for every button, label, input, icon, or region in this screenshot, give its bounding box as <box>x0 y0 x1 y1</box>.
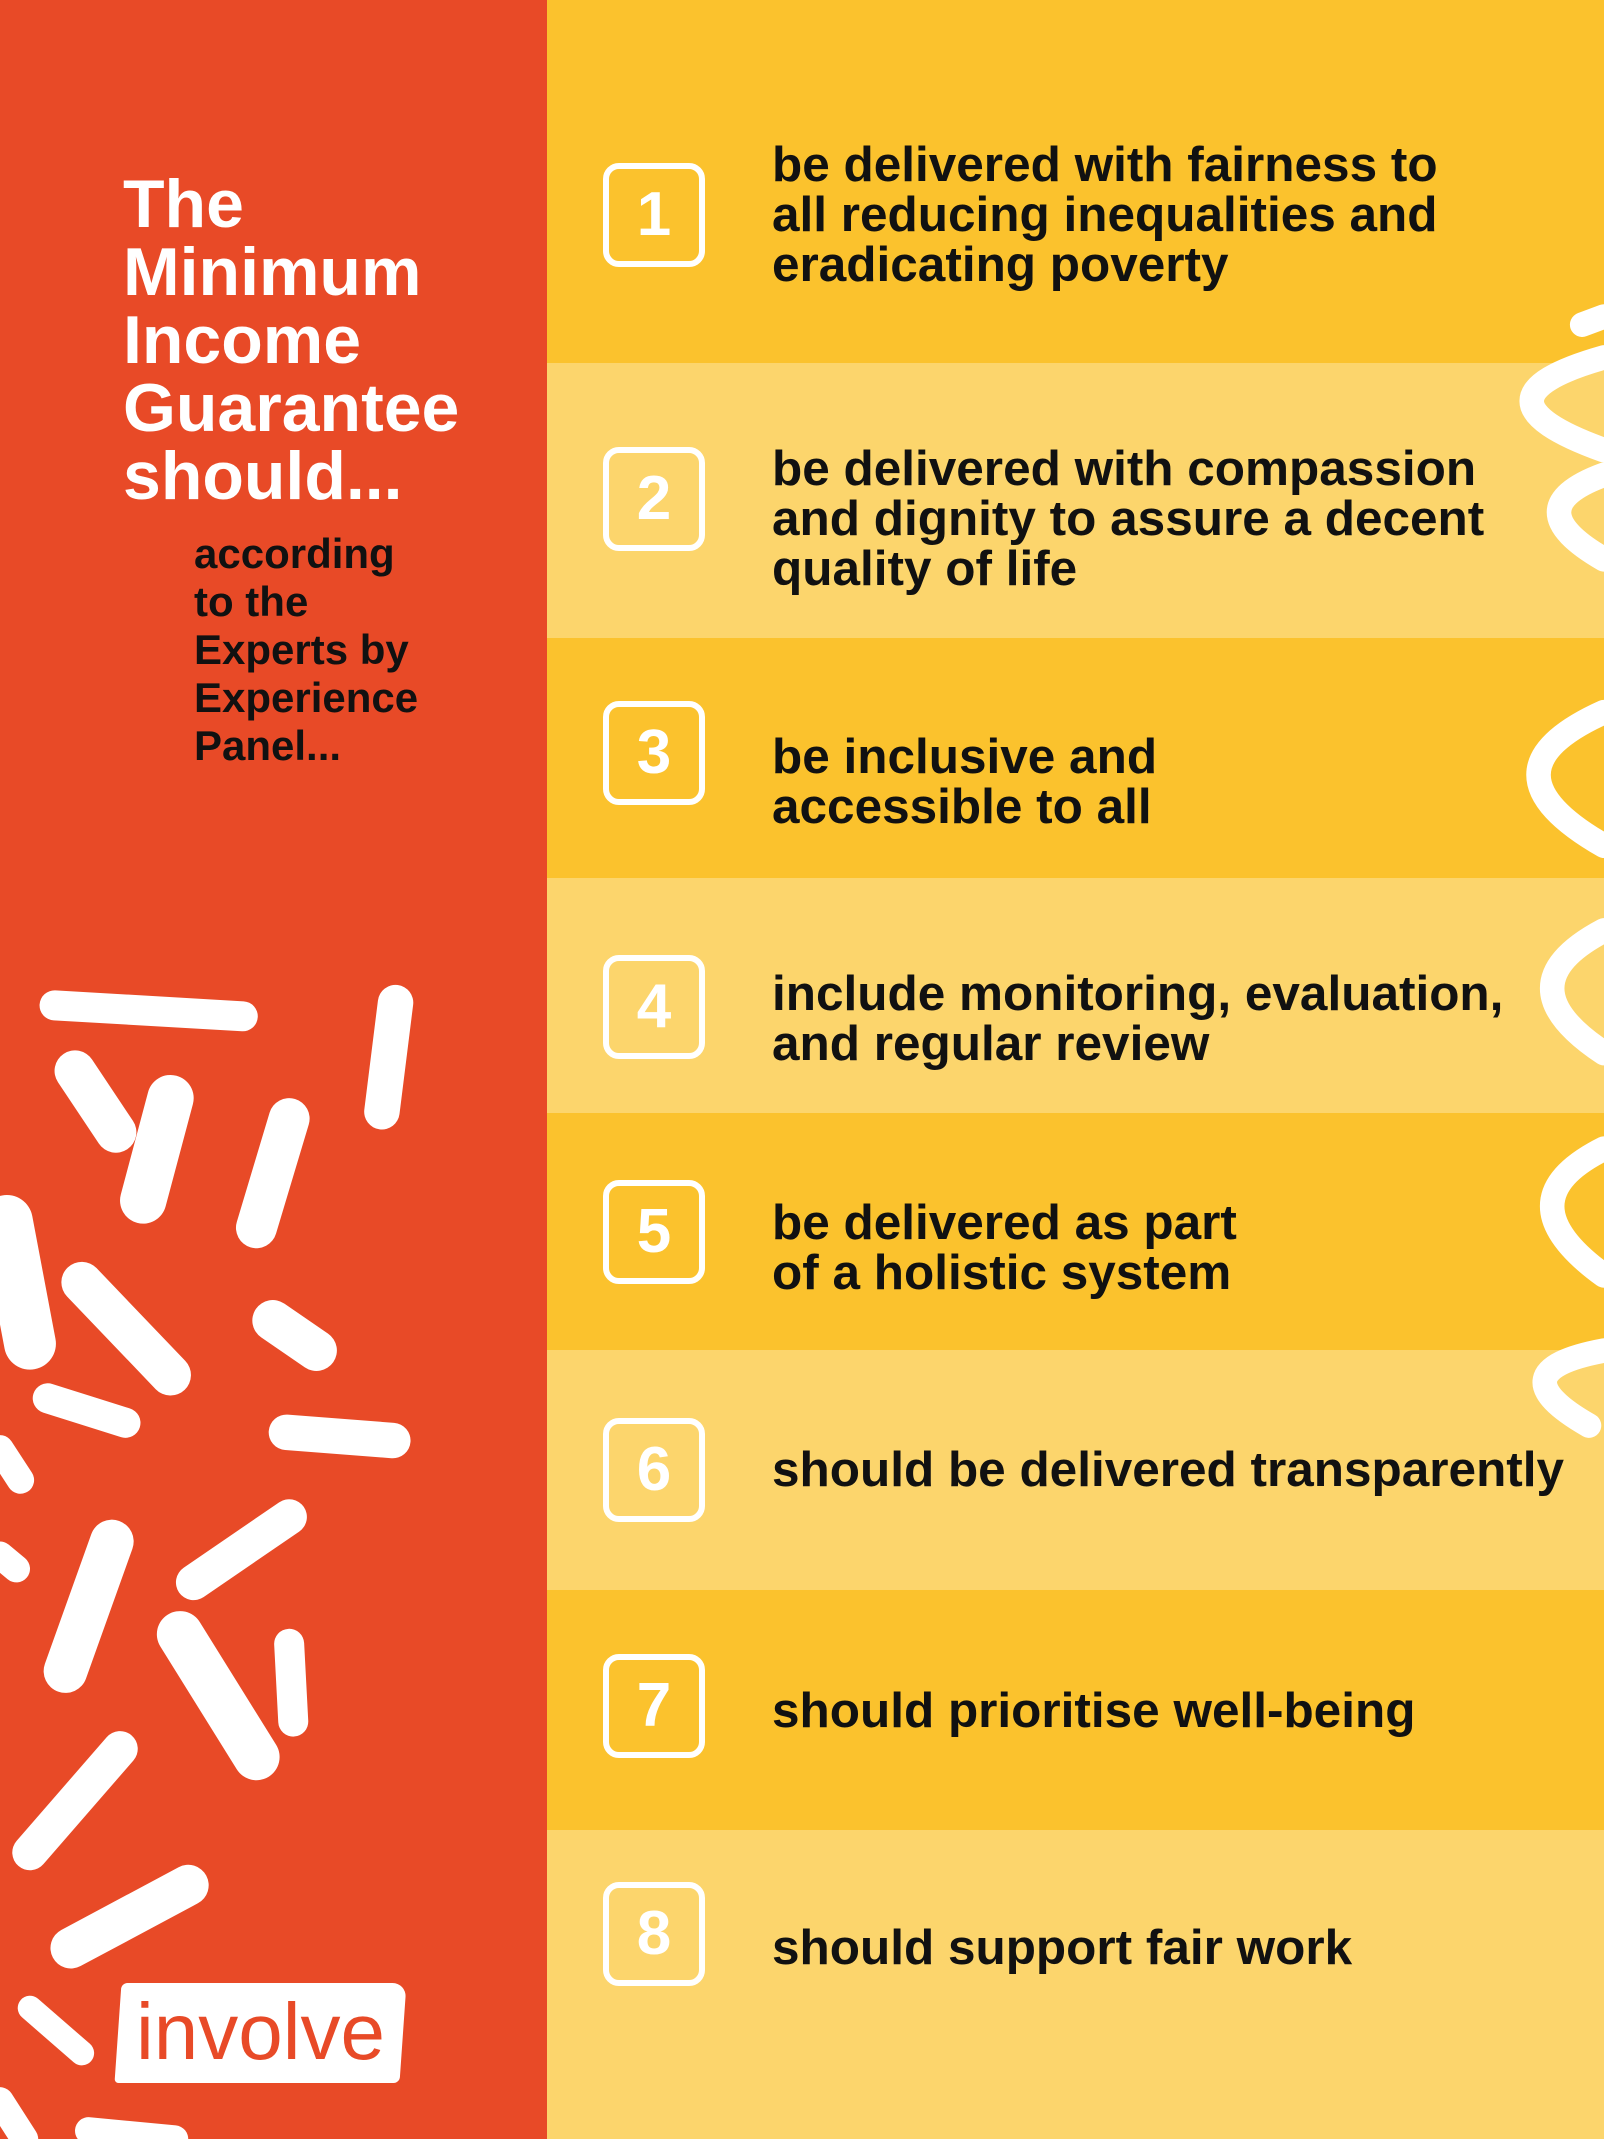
logo: involve: involve <box>136 1987 385 2076</box>
item 4 <box>603 955 1503 1071</box>
text: be delivered with compassion <box>772 442 1476 496</box>
title: The <box>123 166 244 242</box>
text: and regular review <box>772 1017 1209 1071</box>
item 8 <box>603 1882 1352 1986</box>
text: accessible to all <box>772 780 1152 834</box>
item 1 <box>603 138 1438 292</box>
subtitle <box>194 530 418 769</box>
text: 6 <box>637 1435 671 1504</box>
title <box>123 166 459 514</box>
subtitle: according <box>194 530 395 577</box>
title: Guarantee <box>123 370 459 446</box>
item 3 <box>603 701 1157 834</box>
title: should... <box>123 438 403 514</box>
text: 3 <box>637 718 671 787</box>
item 7 <box>603 1654 1415 1758</box>
text: 7 <box>637 1671 671 1740</box>
text: 4 <box>637 972 671 1041</box>
panel: left red <box>0 0 547 2139</box>
row backgrounds <box>547 0 1604 363</box>
text: should support fair work <box>772 1921 1352 1975</box>
title: Minimum <box>123 234 421 310</box>
text: should be delivered transparently <box>772 1443 1564 1497</box>
text: include monitoring, evaluation, <box>772 967 1503 1021</box>
text: 1 <box>637 180 671 249</box>
text: be delivered with fairness to <box>772 138 1438 192</box>
subtitle: Experience <box>194 674 418 721</box>
text: 2 <box>637 464 671 533</box>
text: 8 <box>637 1899 671 1968</box>
item 2 <box>603 442 1484 596</box>
subtitle: Experts by <box>194 626 409 673</box>
title: Income <box>123 302 361 378</box>
item 6 <box>603 1418 1564 1522</box>
text: quality of life <box>772 542 1077 596</box>
text: eradicating poverty <box>772 238 1229 292</box>
text: should prioritise well-being <box>772 1684 1415 1738</box>
text: all reducing inequalities and <box>772 188 1438 242</box>
item 5 <box>603 1180 1237 1300</box>
text: be inclusive and <box>772 730 1157 784</box>
subtitle: Panel... <box>194 722 341 769</box>
text: be delivered as part <box>772 1196 1237 1250</box>
text: 5 <box>637 1197 671 1266</box>
text: and dignity to assure a decent <box>772 492 1484 546</box>
subtitle: to the <box>194 578 308 625</box>
text: of a holistic system <box>772 1246 1231 1300</box>
